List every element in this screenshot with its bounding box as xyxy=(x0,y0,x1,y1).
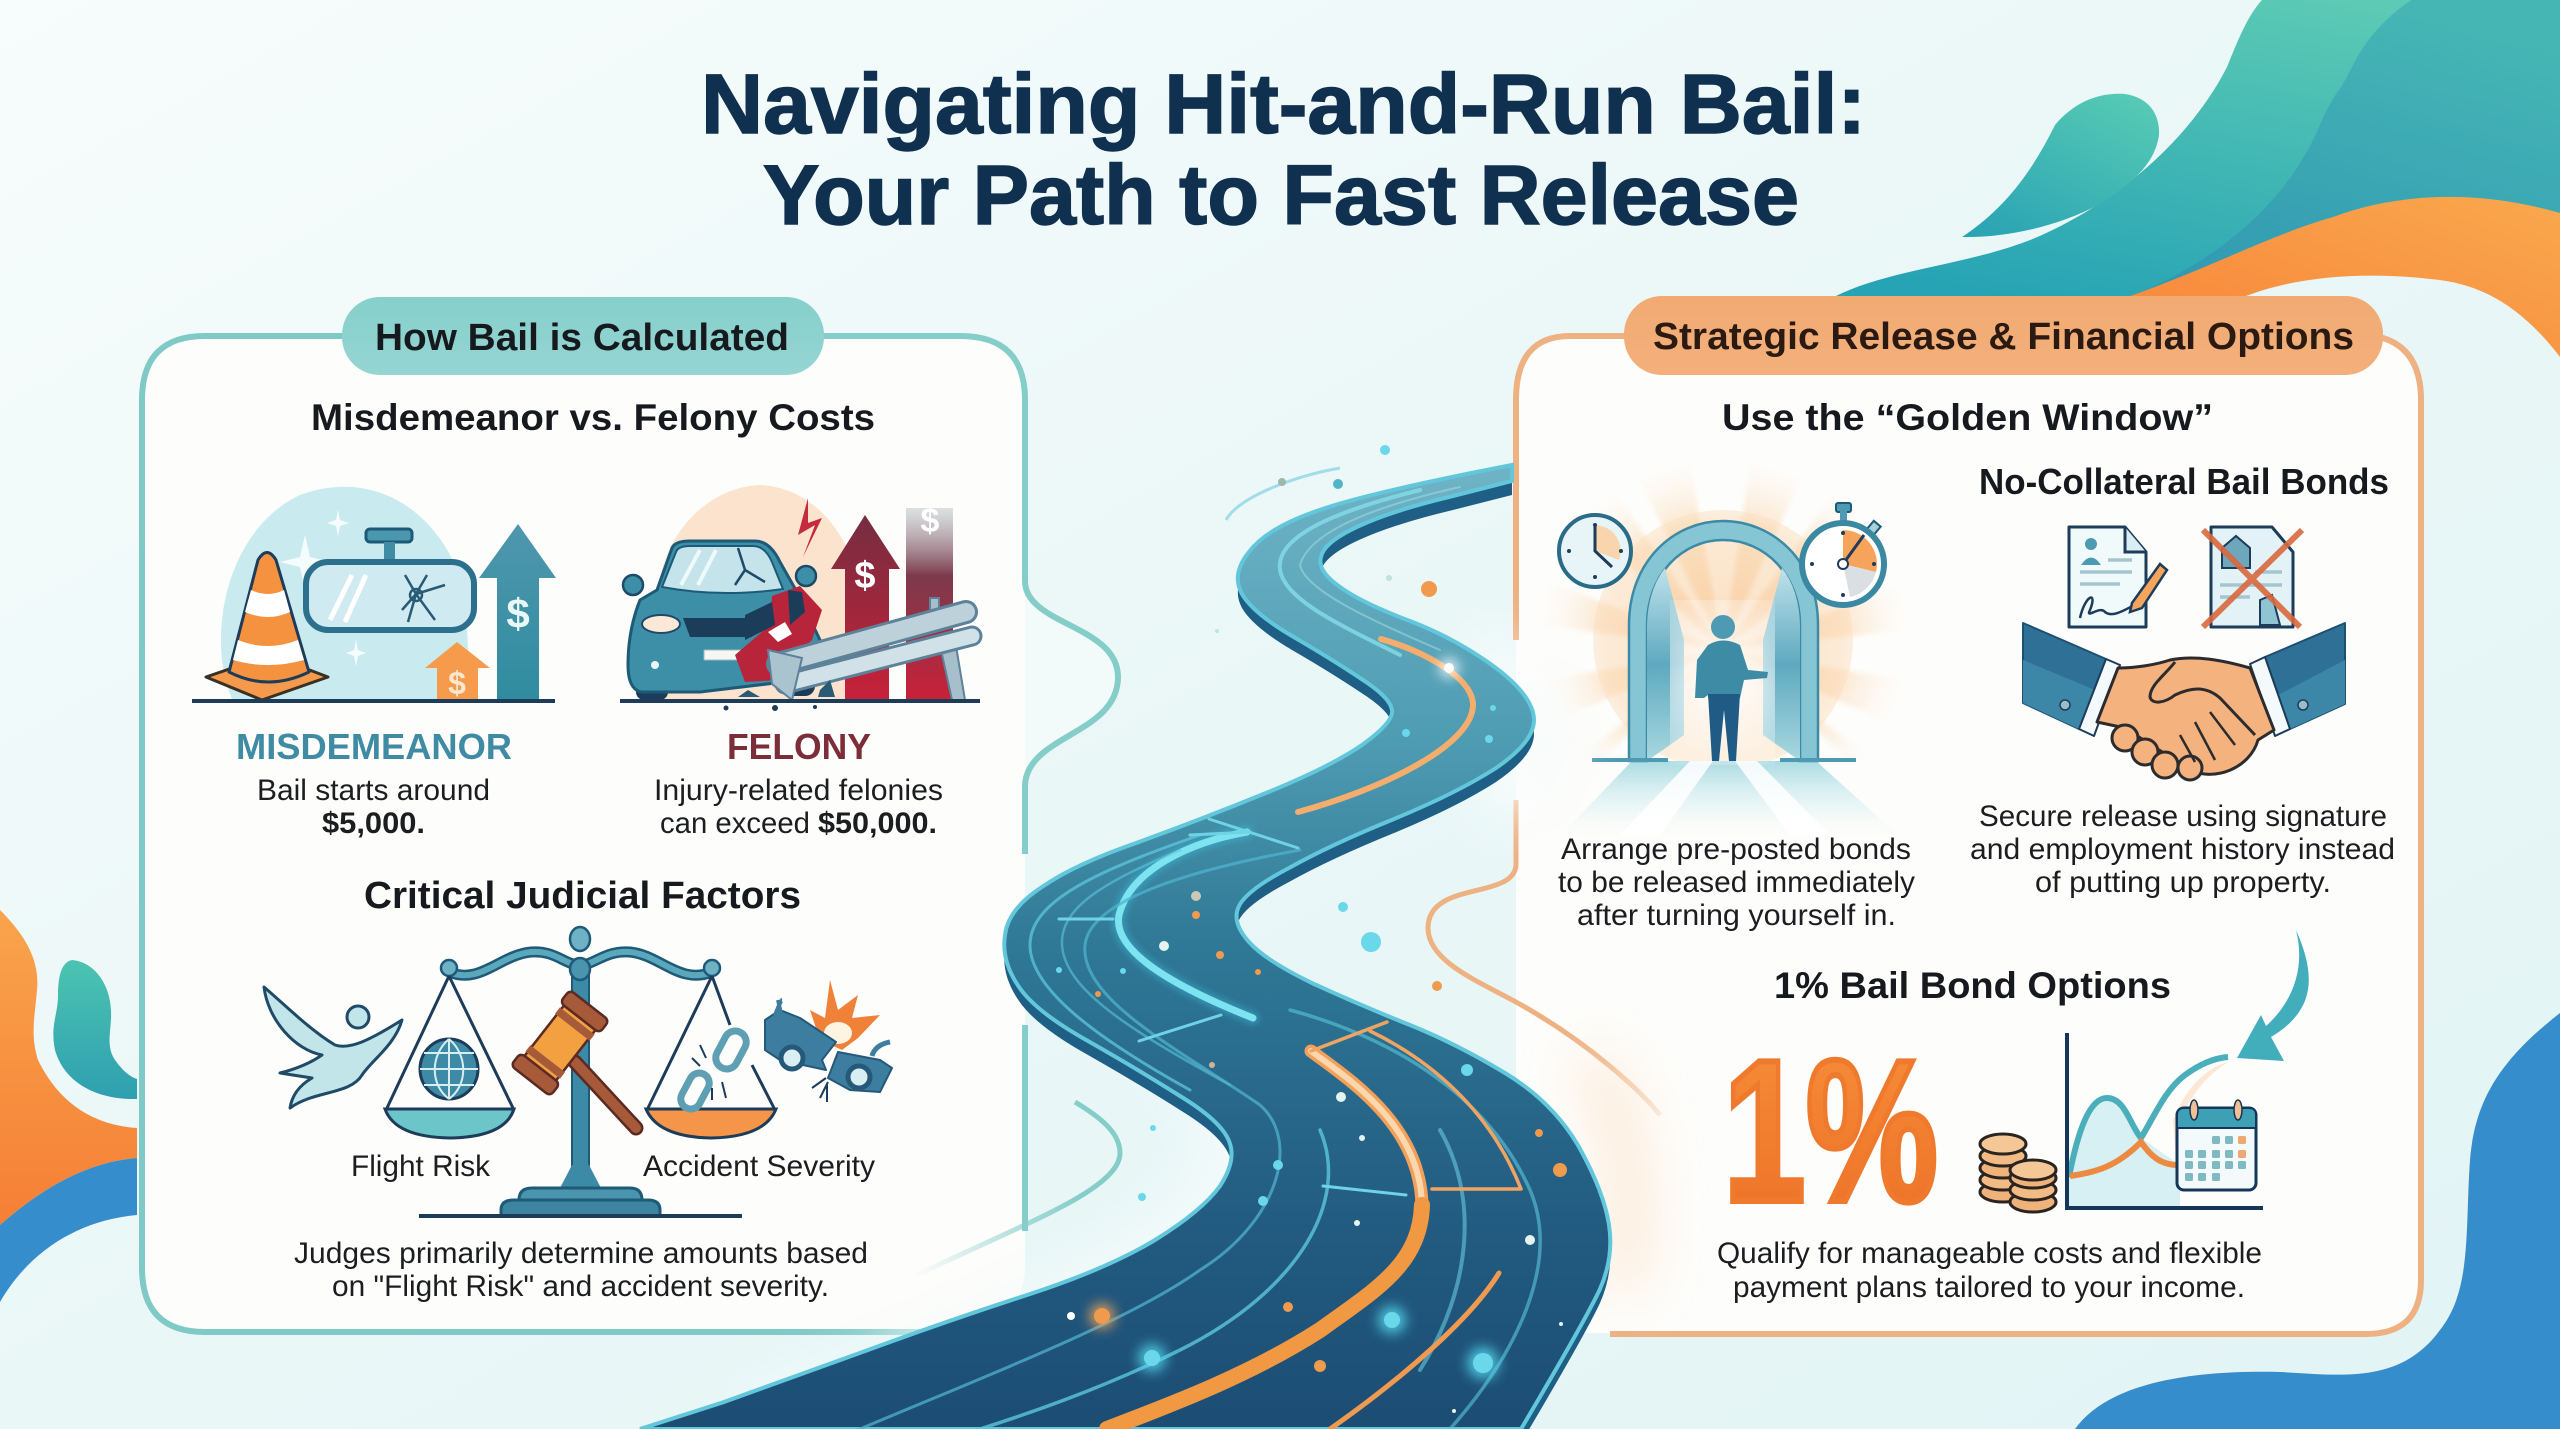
road lane lines: cyan xyxy=(860,487,1540,1429)
icon: bent guardrail xyxy=(738,598,972,700)
icon: stopwatch xyxy=(1802,503,1884,605)
text: one percent description: Qualify for manageable costs and flexible xyxy=(1717,1237,2262,1270)
text: golden window description: to be released immediately xyxy=(1558,866,1915,899)
subheading: golden window: Use the “Golden Window” xyxy=(1722,397,2213,438)
text: misdemeanor bail xyxy=(257,774,490,840)
icon: car collision xyxy=(765,980,892,1102)
illustration: no-collateral xyxy=(2023,527,2345,780)
icon: cracked mirror xyxy=(306,529,474,630)
icon: gavel xyxy=(511,990,636,1128)
text: judges summary: on "Flight Risk" and accident severity. xyxy=(332,1270,829,1303)
text: no-collateral description: and employment history instead xyxy=(1970,833,2395,866)
title: Navigating Hit-and-Run Bail: xyxy=(701,57,1866,151)
illustration: scales of justice xyxy=(264,927,892,1218)
text: golden window description: after turning yourself in. xyxy=(1577,899,1896,932)
label: misdemeanor: MISDEMEANOR xyxy=(236,726,512,767)
icon: signed document xyxy=(2069,527,2167,627)
subheading: judicial factors: Critical Judicial Factors xyxy=(364,875,801,917)
light rays xyxy=(1545,465,1905,770)
heading pill: strategic release: Strategic Release & Financial Options xyxy=(1653,316,2354,358)
illustration: felony: $ xyxy=(854,555,876,597)
heading pill: strategic release xyxy=(1624,296,2383,375)
decorative waves: bottom left xyxy=(0,910,137,1302)
icon: gradient bar xyxy=(906,508,953,701)
subheading: no-collateral: No-Collateral Bail Bonds xyxy=(1979,461,2389,502)
icon: wall clock xyxy=(1559,515,1631,587)
text: judges summary: Judges primarily determine amounts based xyxy=(294,1237,868,1270)
icon: balance stand xyxy=(419,927,742,1218)
text: misdemeanor bail: $5,000. xyxy=(322,807,425,840)
text: felony bail xyxy=(654,774,943,840)
label: felony: FELONY xyxy=(727,726,871,767)
text: golden window description: Arrange pre-posted bonds xyxy=(1561,833,1911,866)
text: golden window description xyxy=(1558,833,1915,932)
icon: right pan with broken chain xyxy=(646,976,776,1138)
text: one percent description: payment plans tailored to your income. xyxy=(1733,1271,2245,1304)
icon: handshake xyxy=(2023,623,2345,780)
title: Your Path to Fast Release xyxy=(763,148,1799,242)
text: no-collateral description: Secure release using signature xyxy=(1979,800,2387,833)
icon: flying figure xyxy=(264,987,402,1108)
icon: lightning bolt xyxy=(798,498,822,557)
subheading: one percent options: 1% Bail Bond Options xyxy=(1774,965,2171,1006)
illustration: misdemeanor: $ xyxy=(448,665,466,701)
icon: person xyxy=(1695,615,1768,761)
chart: payment plan curves xyxy=(2067,1033,2263,1208)
illustration: misdemeanor xyxy=(192,487,556,703)
illustration: winding road xyxy=(640,445,1610,1429)
panel: how bail is calculated xyxy=(141,297,1120,1332)
label: accident severity: Accident Severity xyxy=(643,1150,875,1183)
ground glow xyxy=(1561,761,1898,835)
icon: red arrow xyxy=(831,515,900,701)
icon: coin stacks xyxy=(1980,1134,2056,1212)
heading pill: how bail is calculated: How Bail is Calculated xyxy=(375,317,789,359)
arrow: curved teal xyxy=(2237,930,2309,1061)
icon: large rising arrow xyxy=(479,524,556,701)
text: felony bail: Injury-related felonies xyxy=(654,774,943,807)
label: flight risk: Flight Risk xyxy=(351,1150,491,1183)
road light dots xyxy=(1056,445,1567,1413)
icon: calendar xyxy=(2177,1100,2256,1190)
text: felony bail: $50,000. xyxy=(818,807,937,840)
text: misdemeanor bail: Bail starts around xyxy=(257,774,490,807)
text: no-collateral description xyxy=(1970,800,2395,899)
icon: left pan with globe xyxy=(385,976,514,1138)
subheading: misdemeanor vs felony: Misdemeanor vs. Felony Costs xyxy=(311,397,875,438)
decorative wave: bottom right xyxy=(2075,1013,2560,1429)
heading pill: how bail is calculated xyxy=(342,297,824,375)
text: felony bail: can exceed xyxy=(660,807,810,840)
text: judges summary xyxy=(294,1237,868,1303)
decorative waves: top right xyxy=(1834,0,2560,357)
icon: traffic cone xyxy=(206,552,328,700)
road glow xyxy=(760,640,1630,1429)
panel: strategic release and financial options xyxy=(1428,296,2421,1334)
road lane lines: orange xyxy=(1107,639,1521,1429)
illustration: misdemeanor: $ xyxy=(506,590,530,637)
text: one percent description xyxy=(1717,1237,2262,1304)
decorative drop xyxy=(1962,94,2159,237)
illustration: felony: $ xyxy=(921,502,940,540)
icon: archway xyxy=(1592,521,1856,765)
big number: one percent: 1% xyxy=(1723,1018,1938,1245)
text: no-collateral description: of putting up property. xyxy=(2035,866,2331,899)
icon: crashed car xyxy=(623,541,822,700)
icon: small rising arrow xyxy=(425,642,490,701)
illustration: felony xyxy=(620,485,980,711)
illustration: golden window xyxy=(1545,465,1905,835)
title xyxy=(701,57,1866,242)
icon: crossed-out property document xyxy=(2203,527,2302,627)
